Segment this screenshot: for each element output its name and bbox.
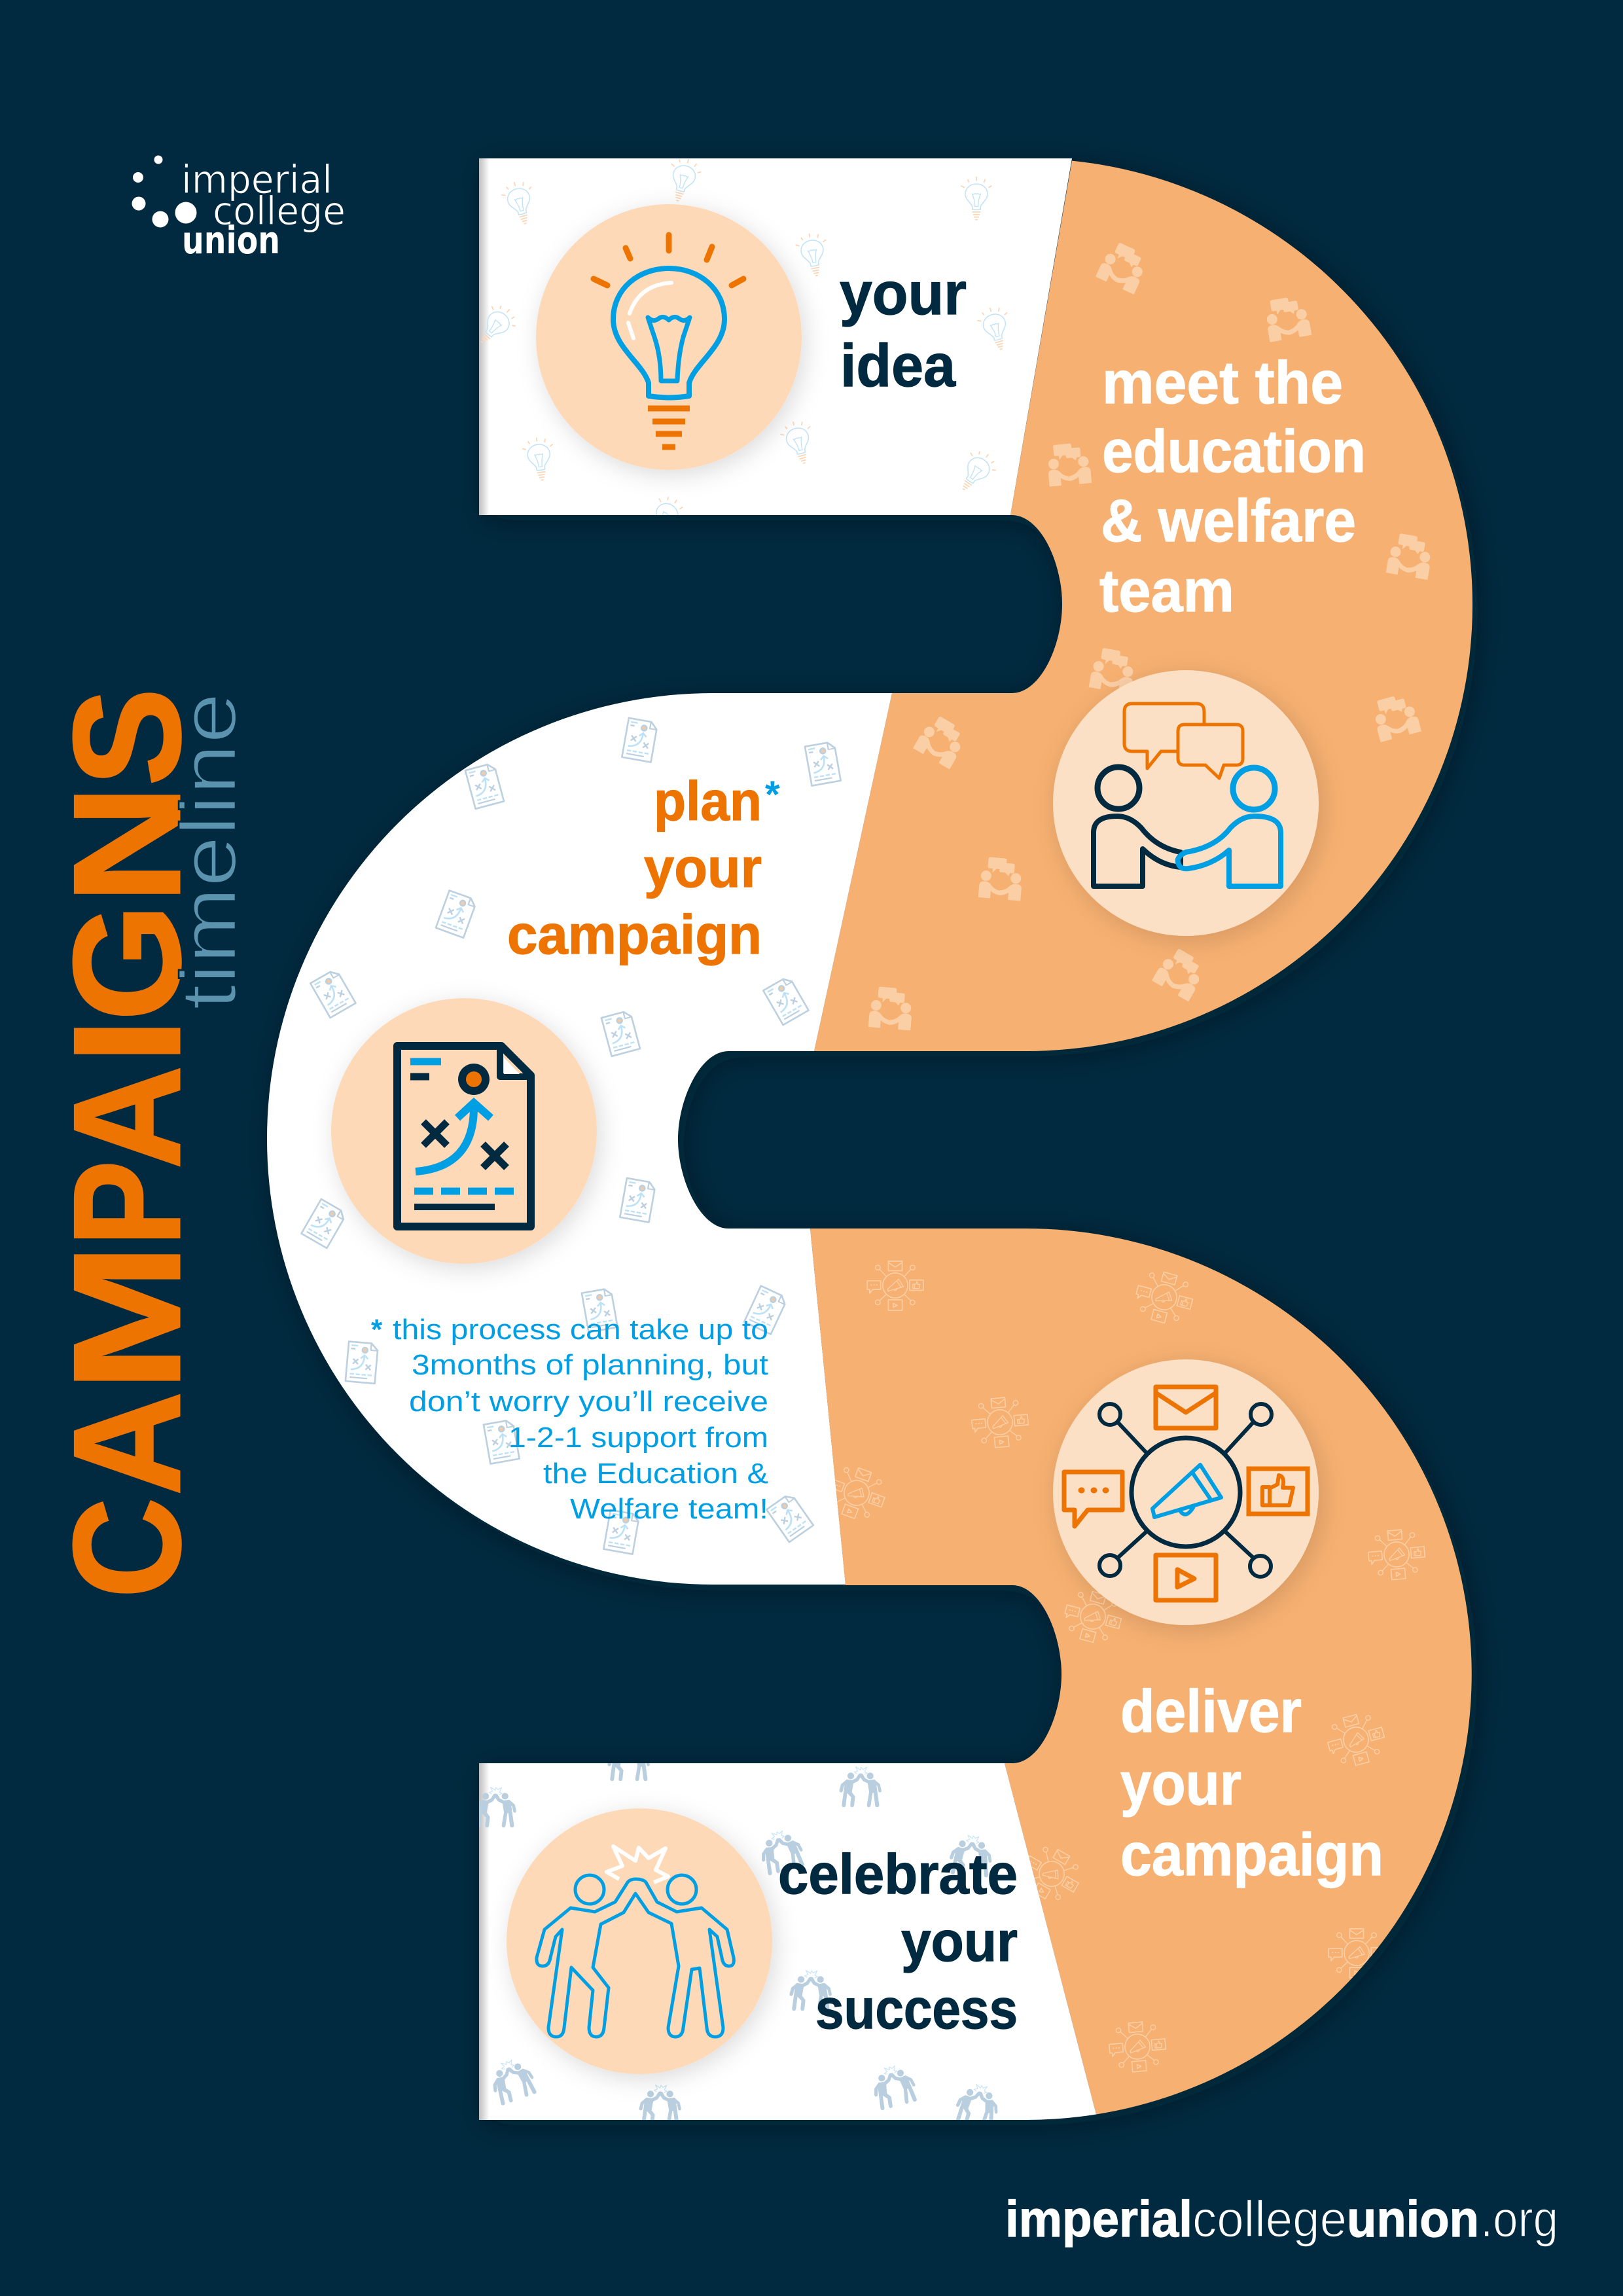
footer: website address: college bbox=[1192, 2190, 1347, 2248]
heading: meet the education and welfare team: & welfare bbox=[1101, 488, 1356, 554]
icon: handshake with speech bubbles bbox=[1094, 704, 1281, 886]
title: CAMPAIGNS: P bbox=[43, 1160, 212, 1246]
title: CAMPAIGNS: A bbox=[43, 1391, 212, 1496]
circle: plan bbox=[331, 998, 597, 1264]
panel: meet the education and welfare team bbox=[814, 161, 1472, 1051]
footer: website address: union bbox=[1347, 2190, 1479, 2248]
heading: your idea: idea bbox=[840, 332, 956, 399]
footnote: 1-2-1 support from bbox=[508, 1422, 768, 1454]
circle: meet bbox=[1053, 670, 1319, 936]
heading: celebrate your success: success bbox=[815, 1978, 1018, 2041]
title: CAMPAIGNS: A bbox=[43, 1066, 212, 1169]
title: CAMPAIGNS: G bbox=[43, 904, 212, 1021]
heading: deliver your campaign: your bbox=[1120, 1751, 1241, 1818]
footnote: Welfare team! bbox=[570, 1493, 768, 1525]
title: CAMPAIGNS: C bbox=[43, 1498, 212, 1598]
circle: deliver bbox=[1053, 1359, 1319, 1625]
heading: your idea: your bbox=[840, 260, 967, 327]
heading: plan your campaign: your bbox=[644, 837, 762, 899]
footnote: don’t worry you’ll receive bbox=[409, 1386, 768, 1418]
footnote: this process can take up to bbox=[393, 1314, 768, 1346]
heading: meet the education and welfare team: team bbox=[1099, 558, 1234, 624]
heading: plan your campaign: plan bbox=[654, 770, 762, 832]
panel: deliver your campaign bbox=[810, 1229, 1472, 2114]
footer: website address: .org bbox=[1480, 2190, 1558, 2248]
icon: strategy document bbox=[397, 1046, 531, 1227]
title: CAMPAIGNS: N bbox=[43, 785, 212, 904]
subtitle: timeline: timeline bbox=[165, 692, 253, 1010]
title: CAMPAIGNS: I bbox=[43, 1018, 212, 1064]
icon: high five bbox=[537, 1846, 734, 2037]
panel: plan your campaign bbox=[267, 693, 892, 1585]
asterisk: * bbox=[765, 774, 780, 816]
circle: idea bbox=[536, 204, 802, 470]
heading: plan your campaign: campaign bbox=[507, 904, 762, 965]
title: CAMPAIGNS: M bbox=[43, 1244, 212, 1391]
logo: imperial college union bbox=[132, 156, 346, 262]
footer: website address: imperial bbox=[1005, 2190, 1192, 2248]
icon: megaphone hub bbox=[1064, 1387, 1308, 1600]
footnote: 3months of planning, but bbox=[412, 1349, 768, 1381]
heading: meet the education and welfare team: meet the bbox=[1102, 350, 1343, 416]
icon: light bulb bbox=[594, 235, 743, 447]
heading: celebrate your success: your bbox=[901, 1910, 1018, 1973]
title: CAMPAIGNS: S bbox=[43, 688, 212, 786]
footnote: the Education & bbox=[543, 1458, 768, 1490]
heading: celebrate your success: celebrate bbox=[778, 1843, 1018, 1906]
logo: imperial college union: imperial bbox=[181, 157, 332, 203]
heading: meet the education and welfare team: education bbox=[1102, 418, 1366, 485]
logo: imperial college union: college bbox=[213, 188, 346, 234]
heading: deliver your campaign: campaign bbox=[1120, 1821, 1383, 1888]
footnote: * bbox=[371, 1314, 383, 1346]
circle: celebrate bbox=[507, 1808, 772, 2074]
panel: celebrate your success bbox=[474, 1741, 1096, 2128]
panel: your idea bbox=[471, 156, 1072, 544]
logo: imperial college union: union bbox=[182, 218, 280, 262]
heading: deliver your campaign: deliver bbox=[1120, 1678, 1302, 1745]
